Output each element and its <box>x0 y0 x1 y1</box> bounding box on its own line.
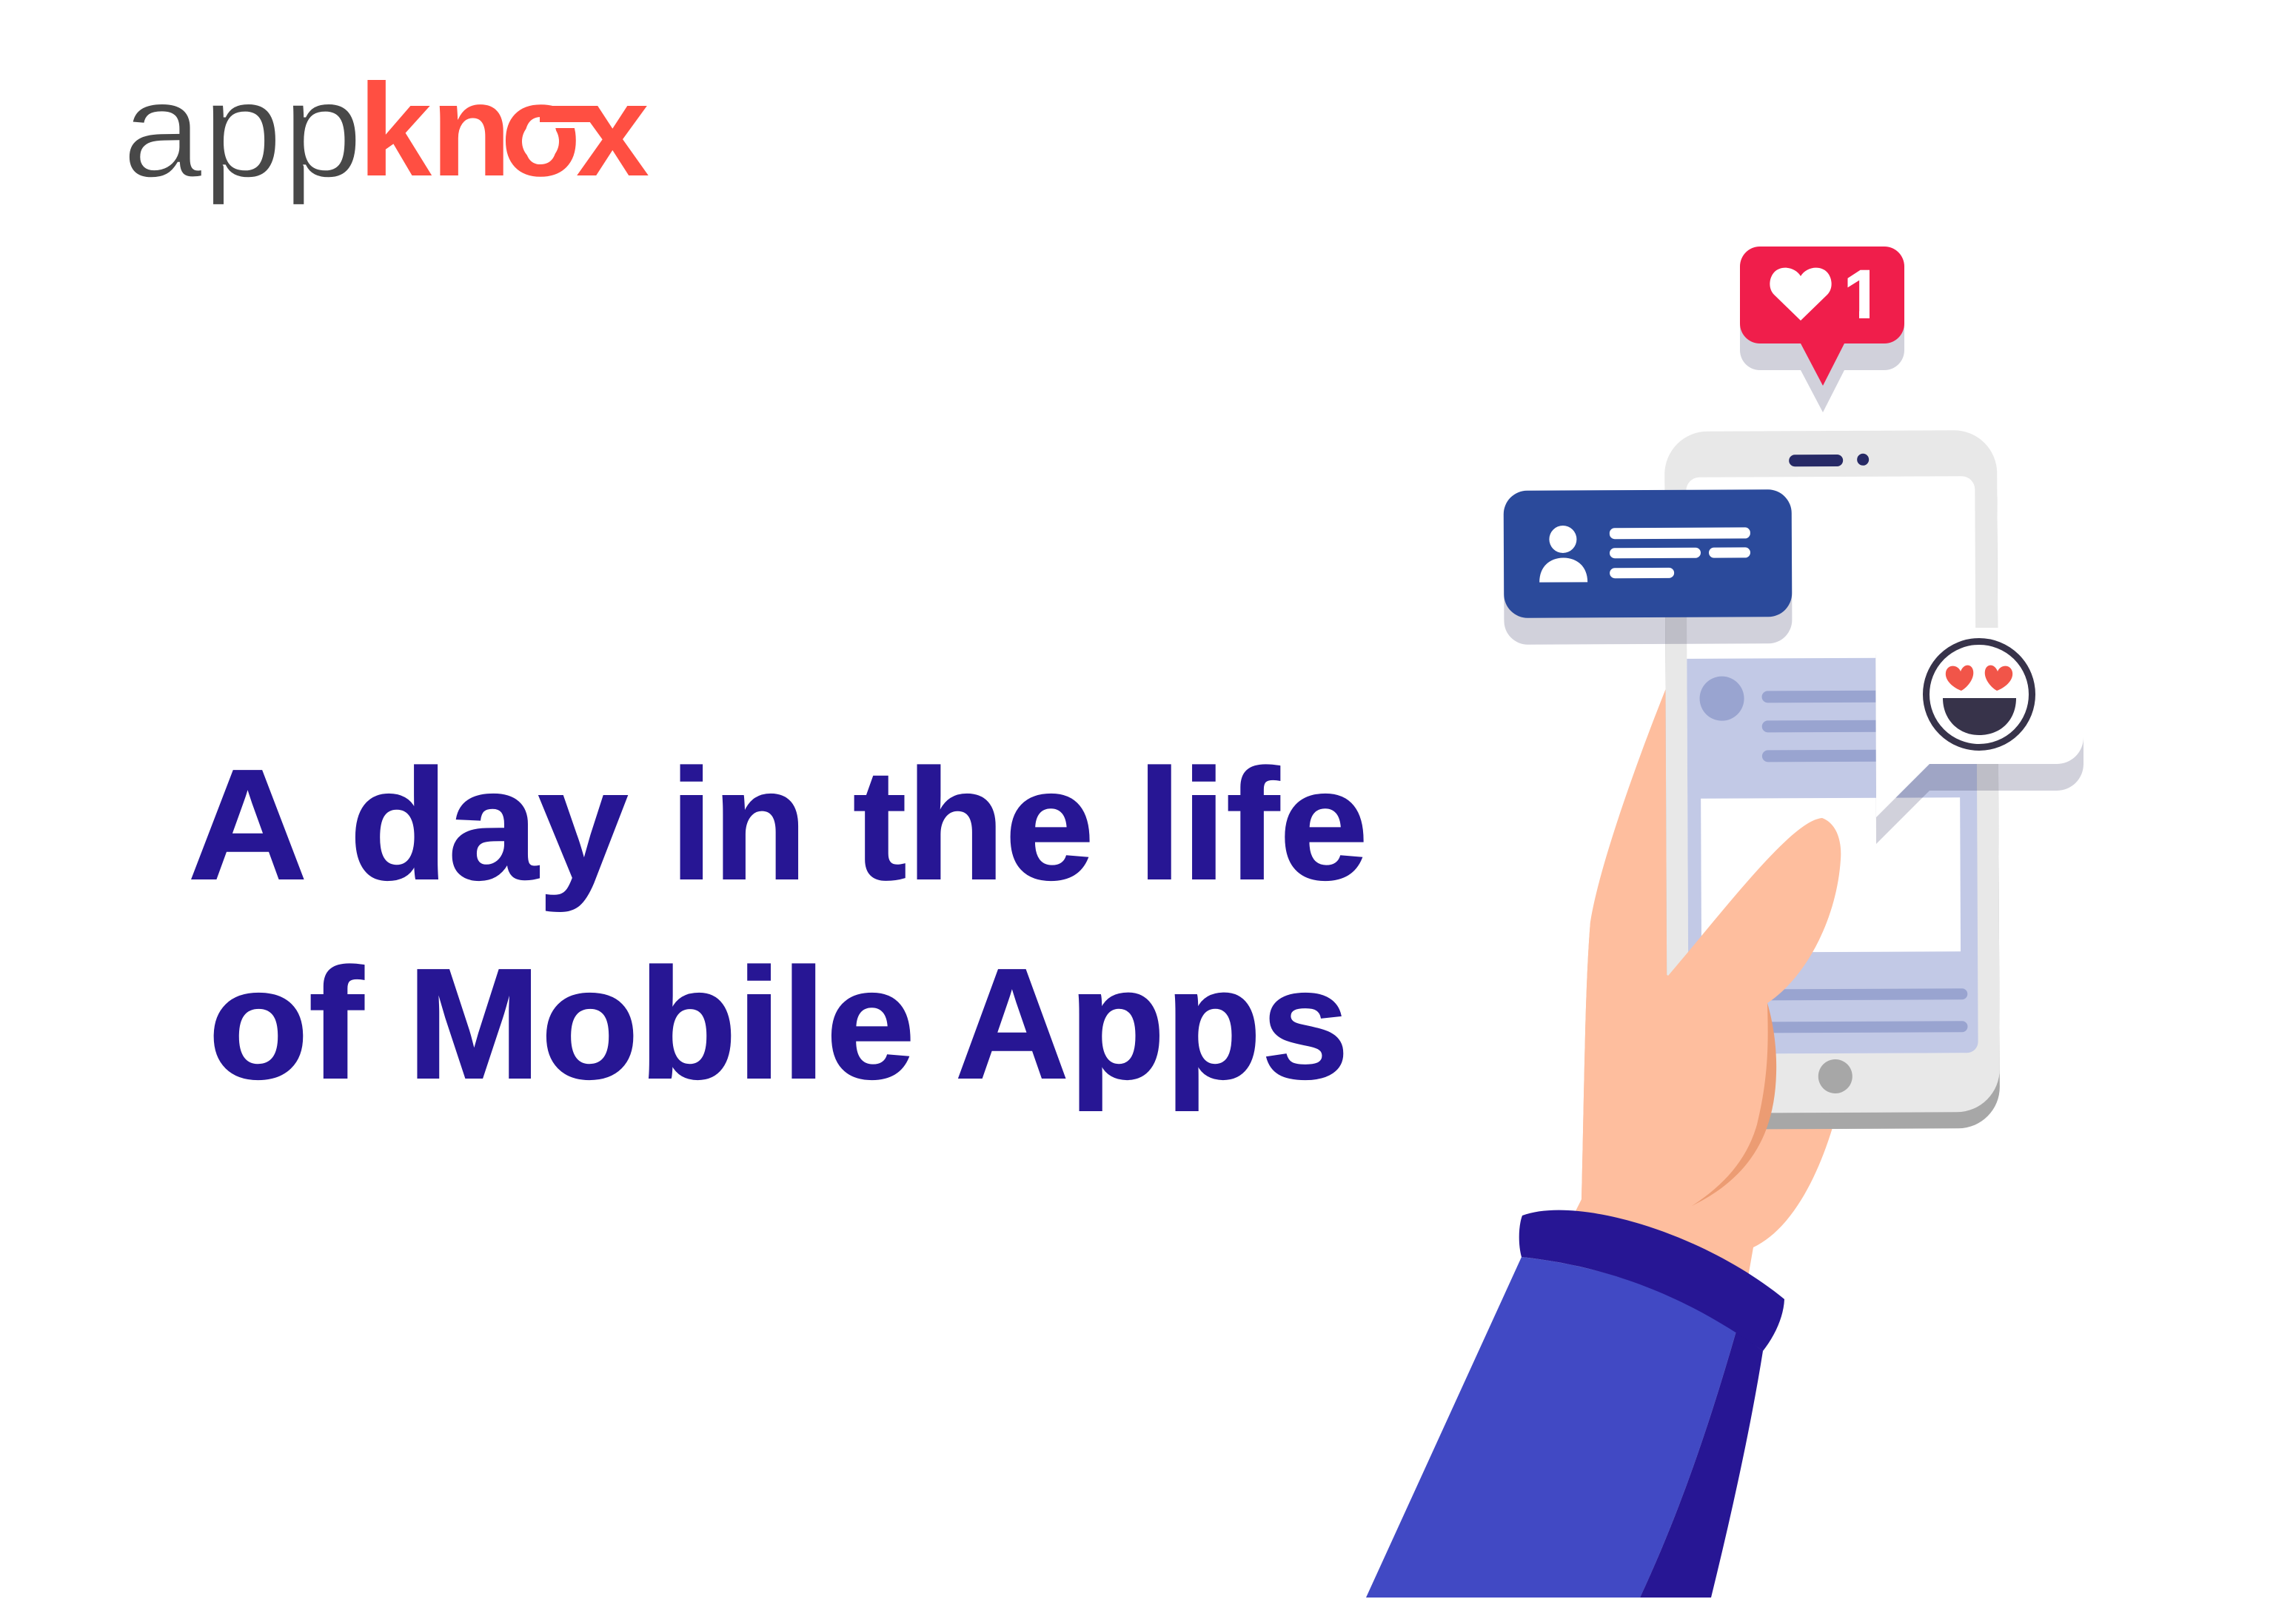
title <box>188 737 1368 1111</box>
badge body <box>1740 247 1904 386</box>
title: the <box>853 737 1094 912</box>
phone <box>1664 430 2000 1130</box>
hand front and thumb <box>1577 818 1841 1229</box>
message card shadow <box>1504 516 1793 645</box>
home button <box>1818 1059 1852 1093</box>
sleeve shadow side <box>1640 1331 1763 1598</box>
title: in <box>670 737 807 912</box>
like count: 1 <box>1844 256 1883 335</box>
sleeve <box>1366 1257 1736 1598</box>
message card <box>1504 489 1793 645</box>
logo word part: knox: knox <box>358 56 649 204</box>
hand back behind phone <box>1573 685 1833 1277</box>
icon: heart <box>1770 268 1832 321</box>
icon: heart-eyes emoji <box>1927 641 2032 748</box>
emoji speech bubble <box>1875 628 2084 844</box>
phone shadow <box>1664 458 2000 1130</box>
bubble body <box>1875 628 2084 817</box>
feed text lines <box>1733 690 1968 1033</box>
message card body <box>1504 489 1792 618</box>
camera <box>1857 454 1869 466</box>
feed avatar <box>1699 677 1744 721</box>
logo: appknox <box>122 54 649 207</box>
message text lines <box>1610 527 1750 578</box>
title: day <box>349 737 628 912</box>
phone body <box>1664 430 2000 1113</box>
cuff <box>1519 1210 1784 1351</box>
feed image area <box>1701 797 1961 953</box>
speaker <box>1789 455 1843 466</box>
title: Apps <box>955 936 1349 1111</box>
like notification badge <box>1740 247 1904 412</box>
title: life <box>1137 737 1368 912</box>
illustration: hand holding phone <box>1366 247 2084 1598</box>
bubble shadow <box>1875 654 2084 844</box>
thumb shade <box>1692 1003 1776 1206</box>
badge shadow <box>1740 273 1904 412</box>
feed card <box>1687 657 1978 1054</box>
title: A <box>188 737 307 912</box>
phone screen <box>1686 476 1978 1054</box>
title: Mobile <box>407 936 915 1111</box>
title: of <box>208 936 364 1111</box>
logo word part: app: app <box>122 54 363 207</box>
logo connector bar from o to x <box>540 106 593 122</box>
logo o counter <box>522 121 559 161</box>
icon: person <box>1539 526 1587 583</box>
logo gap under connector <box>540 122 585 128</box>
